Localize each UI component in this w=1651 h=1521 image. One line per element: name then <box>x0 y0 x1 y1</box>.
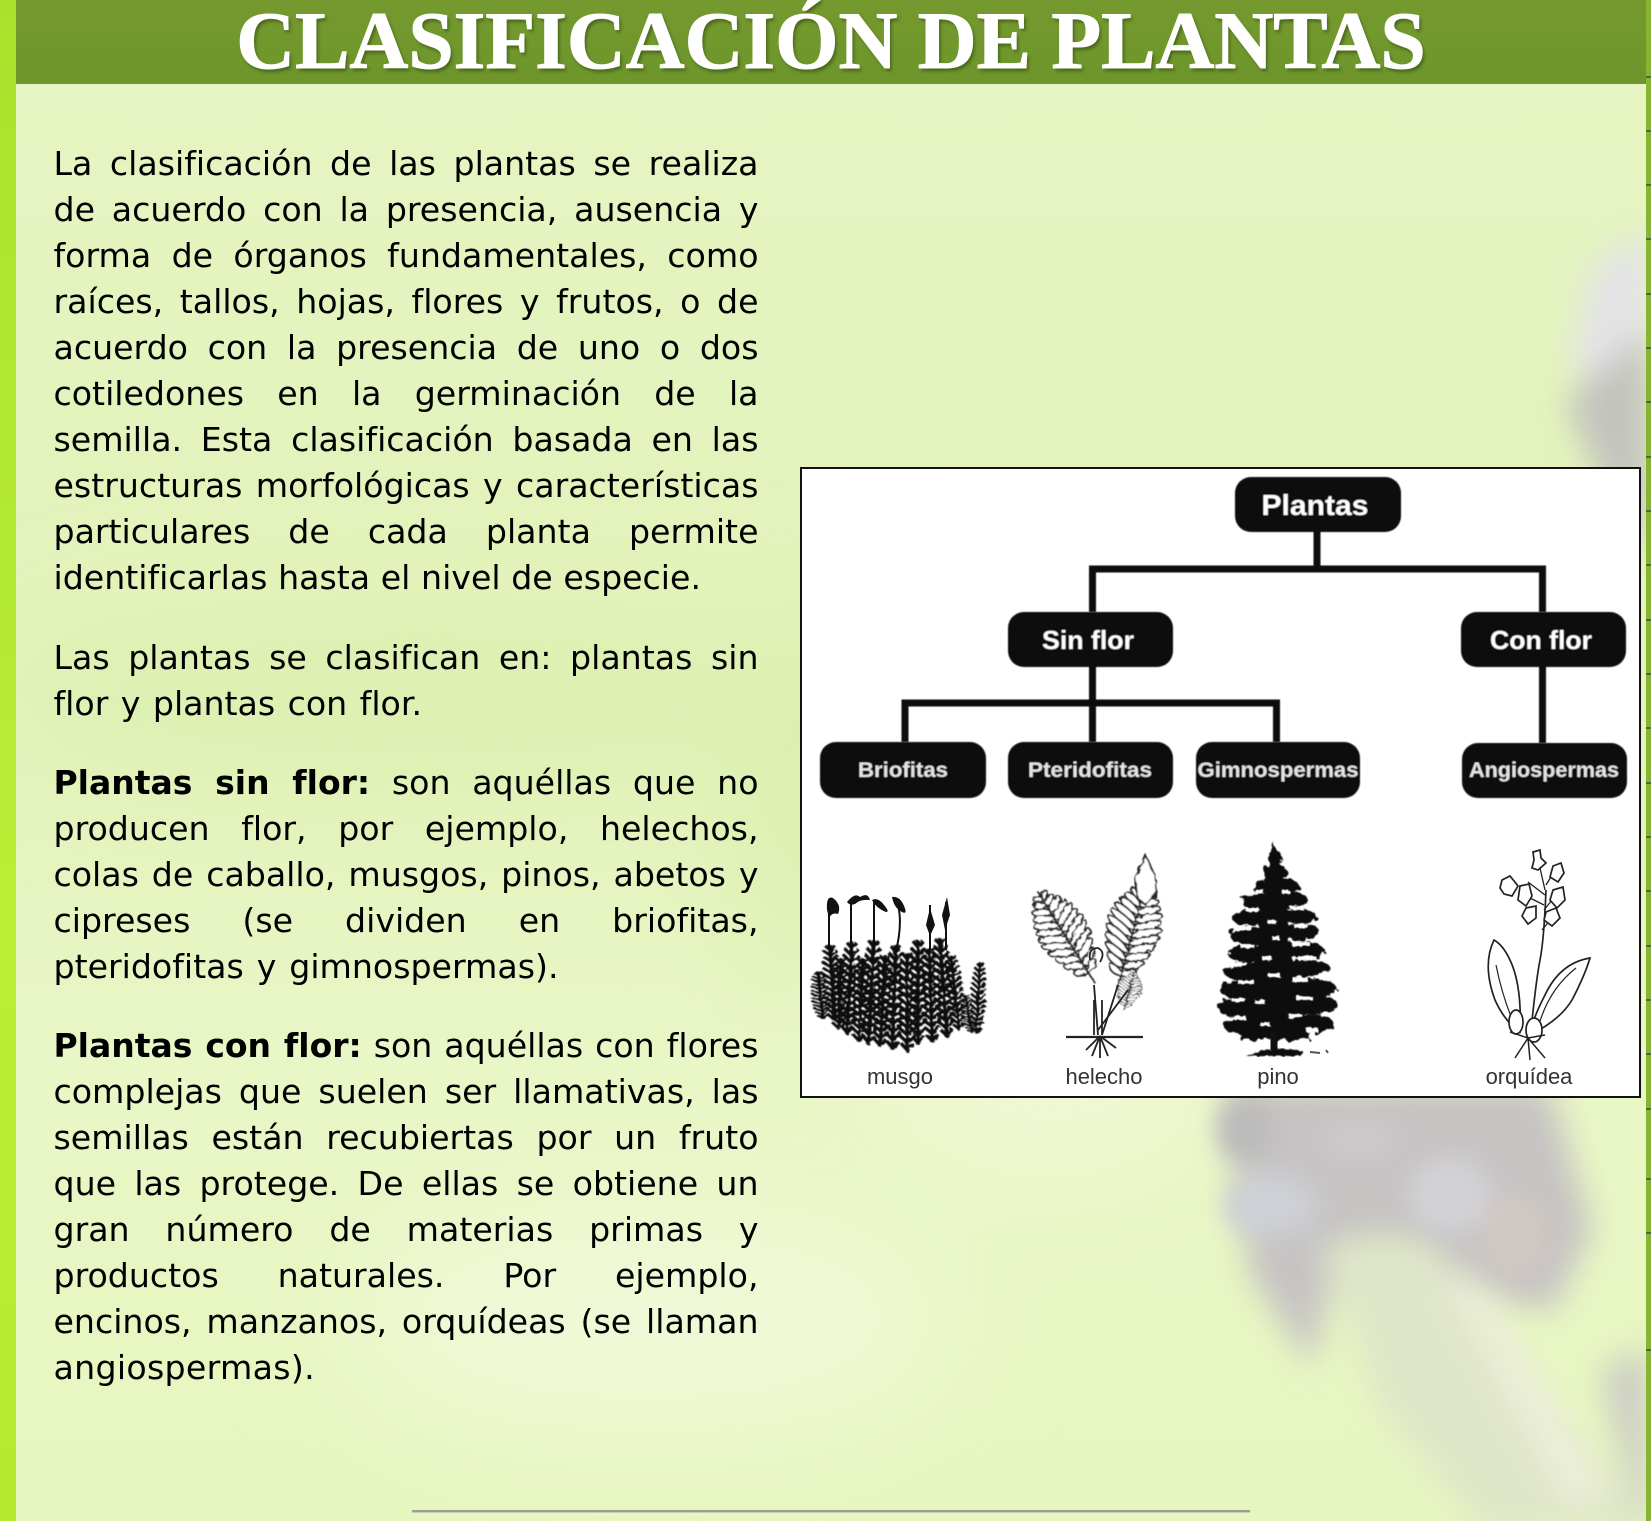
label: pino: pino <box>1257 1064 1299 1089</box>
icon: orchid <box>1488 850 1590 1060</box>
node: Gimnospermas: Gimnospermas <box>1198 759 1358 782</box>
text block: introduction: La clasificación de las plantas se realiza <box>54 144 758 183</box>
text block: plantas sin flor: Plantas sin flor: son aquéllas que no <box>54 763 759 802</box>
text block: plantas con flor: complejas que suelen ser llamativas, las <box>54 1072 758 1111</box>
node: Con flor <box>1461 612 1626 667</box>
icon: fern <box>1015 855 1174 1058</box>
right edge stripe with tick marks <box>1646 0 1651 1521</box>
text block: plantas con flor <box>54 1026 758 1387</box>
text block: introduction: de acuerdo con la presencia, ausencia y <box>54 190 758 229</box>
node: Pteridofitas <box>1008 742 1173 798</box>
node: Briofitas <box>820 742 986 798</box>
text block: plantas sin flor: colas de caballo, musgos, pinos, abetos y <box>54 855 758 894</box>
text block: types of plants <box>54 638 758 723</box>
text block: introduction: estructuras morfológicas y características <box>54 466 758 505</box>
text block: plantas con flor: Plantas con flor: son aquéllas con flores <box>54 1026 758 1065</box>
text block: introduction: cotiledones en la germinación de la <box>54 374 758 413</box>
node: Gimnospermas <box>1196 742 1360 798</box>
text block: plantas sin flor: pteridofitas y gimnospermas). <box>54 947 558 986</box>
icon: pine <box>1218 842 1338 1056</box>
text block: plantas con flor: productos naturales. Por ejemplo, <box>54 1256 758 1295</box>
label: helecho: helecho <box>1065 1064 1143 1089</box>
node: Plantas <box>1235 477 1401 532</box>
bottom rule <box>412 1510 1250 1513</box>
tree connectors <box>905 530 1542 743</box>
text block: plantas con flor: que las protege. De ellas se obtiene un <box>54 1164 758 1203</box>
classification diagram panel <box>800 467 1641 1098</box>
text block: types of plants: Las plantas se clasifican en: plantas sin <box>54 638 758 677</box>
text block: introduction: identificarlas hasta el nivel de especie. <box>54 558 701 597</box>
node: Sin flor: Sin flor <box>1042 625 1134 655</box>
text block: plantas con flor: encinos, manzanos, orquídeas (se llaman <box>54 1302 758 1341</box>
text block: plantas con flor: semillas están recubiertas por un fruto <box>54 1118 758 1157</box>
text block: types of plants: flor y plantas con flor. <box>54 684 422 723</box>
text block: introduction: forma de órganos fundamentales, como <box>54 236 758 275</box>
text block: introduction: acuerdo con la presencia de uno o dos <box>54 328 758 367</box>
node: Plantas: Plantas <box>1262 490 1368 522</box>
panel background <box>801 468 1640 1097</box>
label: orquídea: orquídea <box>1486 1064 1573 1089</box>
text block: introduction <box>54 144 758 597</box>
text block: introduction: raíces, tallos, hojas, flores y frutos, o de <box>54 282 758 321</box>
text block: introduction: particulares de cada planta permite <box>54 512 758 551</box>
text block: introduction: semilla. Esta clasificación basada en las <box>54 420 758 459</box>
icon: moss <box>809 895 987 1052</box>
node: Sin flor <box>1008 612 1173 667</box>
text block: plantas sin flor <box>54 763 759 986</box>
label: musgo: musgo <box>867 1064 933 1089</box>
node: Briofitas: Briofitas <box>858 759 948 782</box>
node: Pteridofitas: Pteridofitas <box>1028 759 1152 782</box>
node: Con flor: Con flor <box>1490 625 1592 655</box>
text block: plantas con flor: gran número de materias primas y <box>54 1210 758 1249</box>
node: Angiospermas: Angiospermas <box>1469 759 1619 782</box>
text block: plantas sin flor: cipreses (se dividen en briofitas, <box>54 901 758 940</box>
left accent stripe <box>0 0 16 1521</box>
text block: plantas sin flor: producen flor, por ejemplo, helechos, <box>54 809 758 848</box>
text block: plantas con flor: angiospermas). <box>54 1348 315 1387</box>
node: Angiospermas <box>1462 743 1627 798</box>
